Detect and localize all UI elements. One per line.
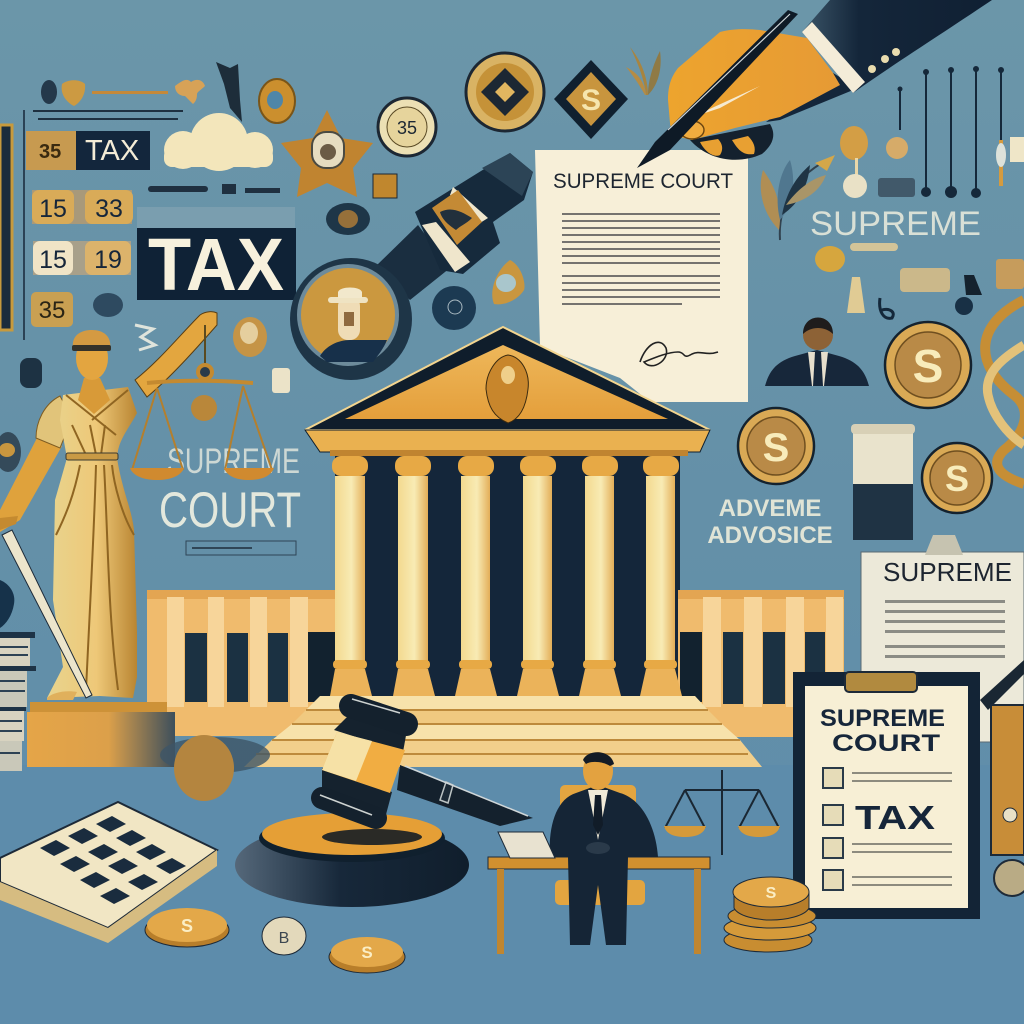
lens bbox=[290, 258, 412, 380]
icon: gold seal bbox=[466, 53, 544, 131]
icon: round stamp: 35 bbox=[397, 118, 417, 138]
steps bbox=[244, 696, 762, 767]
column 4 bbox=[517, 456, 559, 696]
icon: note bbox=[373, 174, 397, 198]
icon: dark plant bbox=[216, 62, 242, 122]
column 2 bbox=[393, 456, 435, 696]
coin B: B bbox=[279, 930, 289, 947]
icon: oval shield bbox=[233, 317, 267, 357]
icon: coin small bbox=[191, 395, 217, 421]
icon: diamond S badge: S bbox=[581, 84, 601, 117]
scales bbox=[132, 325, 272, 470]
speckled band above tax bbox=[137, 207, 295, 228]
number tag 15 33: 15 bbox=[39, 195, 67, 223]
coin right: S bbox=[945, 458, 969, 499]
grid cells bbox=[40, 816, 186, 904]
cuff bbox=[802, 22, 865, 93]
number tag 15 19: 15 bbox=[39, 246, 67, 274]
folds bbox=[56, 390, 134, 690]
top neck bbox=[334, 712, 407, 752]
number tag 15 19 bbox=[33, 241, 131, 275]
icon: flower bbox=[175, 80, 205, 104]
text: supreme court left bbox=[159, 442, 301, 555]
shadow patch bbox=[160, 737, 270, 773]
binder right bbox=[991, 705, 1024, 855]
icon: dark oval bbox=[41, 80, 57, 104]
icon: gold shield bbox=[62, 80, 85, 106]
column 6 bbox=[640, 456, 682, 696]
cuff lower bbox=[422, 222, 470, 272]
panel: left tax labels bbox=[0, 110, 150, 340]
text: adveme advosice: ADVEME bbox=[719, 495, 821, 522]
icon: hanging pens bbox=[898, 66, 1004, 198]
chair bbox=[555, 785, 645, 905]
lawyer at desk bbox=[488, 752, 780, 954]
lady justice statue bbox=[0, 312, 274, 767]
vertical rule bbox=[23, 110, 25, 340]
coin large top: S bbox=[913, 340, 943, 392]
lower arm bbox=[0, 436, 62, 532]
coin fragment bbox=[174, 735, 234, 801]
text: supreme court left: COURT bbox=[159, 482, 301, 538]
icon: helix rope bbox=[985, 300, 1024, 484]
stack of books left bbox=[0, 632, 36, 771]
icon: left flower bbox=[0, 580, 14, 628]
icon: cream chip bbox=[272, 368, 290, 393]
heading: TAX: TAX bbox=[148, 223, 284, 306]
heading: supreme: SUPREME bbox=[810, 205, 981, 243]
text: adveme advosice: ADVOSICE bbox=[707, 522, 833, 549]
man body bbox=[550, 785, 658, 945]
document: supreme court bbox=[535, 150, 748, 402]
document: supreme: SUPREME bbox=[883, 557, 1012, 587]
icon: spoon bbox=[996, 140, 1006, 186]
icon: star emblem bbox=[281, 110, 373, 197]
icon: dash bar bbox=[92, 91, 168, 94]
panel: pediment temple bbox=[147, 327, 844, 767]
small caption lines bbox=[186, 541, 296, 555]
icon: note bbox=[1010, 137, 1024, 162]
columns bbox=[330, 456, 682, 696]
clipboard: SUPREME bbox=[820, 705, 945, 732]
pedestal bbox=[27, 702, 175, 767]
hair bbox=[583, 752, 614, 766]
icon: cream bar bbox=[850, 243, 898, 251]
tax label small: 35 bbox=[39, 141, 61, 163]
tie bbox=[593, 795, 603, 835]
dark fingers bbox=[690, 124, 773, 160]
colonnade back bbox=[335, 456, 680, 696]
decorative icons top row bbox=[0, 47, 661, 628]
coin C bbox=[329, 937, 405, 973]
icon: diamond S badge bbox=[554, 60, 628, 139]
icon: head fragment bbox=[996, 259, 1024, 289]
pen right bbox=[980, 660, 1024, 710]
bottom neck bbox=[322, 768, 392, 822]
clipboard: TAX bbox=[855, 799, 935, 836]
bottom cap bbox=[322, 798, 376, 818]
pans bbox=[664, 826, 780, 837]
desk bbox=[488, 857, 710, 954]
icon: round stamp bbox=[378, 98, 436, 156]
small coin right bottom bbox=[994, 860, 1024, 896]
hair bbox=[73, 330, 110, 349]
icon: cloud bbox=[164, 113, 273, 171]
bottom highlight bbox=[320, 795, 372, 815]
body text lines bbox=[562, 213, 720, 305]
buttons bbox=[868, 48, 900, 73]
clipboard: COURT bbox=[832, 730, 940, 757]
tax label small bbox=[26, 131, 150, 170]
sound block bbox=[235, 813, 469, 907]
head gold bbox=[322, 732, 405, 793]
icon: six mark bbox=[880, 298, 893, 318]
left fence bbox=[147, 590, 335, 736]
small scales bbox=[665, 770, 779, 855]
pen bbox=[637, 10, 798, 168]
head bbox=[583, 752, 613, 790]
icon: striped item bbox=[878, 178, 915, 197]
pediment bbox=[305, 327, 710, 456]
hand bbox=[432, 190, 482, 245]
icon: tan seal bbox=[492, 260, 524, 304]
blindfold bbox=[72, 345, 111, 351]
coin A bbox=[145, 908, 229, 947]
icon: leaf plant bbox=[626, 47, 661, 95]
icon: cream bottle bbox=[847, 277, 865, 313]
coin center bbox=[738, 408, 814, 484]
top highlight bbox=[352, 699, 400, 713]
icon: bottle bbox=[843, 158, 867, 198]
gavel bbox=[235, 699, 533, 907]
left edge strip bbox=[0, 125, 12, 330]
feet bbox=[47, 691, 77, 700]
coin A: S bbox=[181, 916, 193, 936]
handle highlight bbox=[405, 766, 528, 816]
coin large top bbox=[885, 322, 971, 408]
dark blob bbox=[93, 293, 123, 317]
belt bbox=[66, 453, 118, 460]
arm lower sleeve bbox=[374, 225, 450, 300]
tax label small: TAX bbox=[85, 135, 139, 167]
hands bbox=[586, 842, 610, 854]
sleeve left bbox=[36, 396, 72, 448]
raised arm bbox=[135, 312, 217, 397]
coin B bbox=[262, 917, 306, 955]
neck bbox=[78, 378, 110, 414]
number tag 15 19: 19 bbox=[94, 246, 122, 274]
number tag 15 33 bbox=[32, 190, 133, 224]
number tag 35 bbox=[31, 292, 73, 327]
icon: oval emblem bbox=[259, 79, 295, 123]
icon: small dark row bbox=[148, 184, 280, 194]
checkboxes bbox=[823, 768, 843, 890]
column 5 bbox=[579, 456, 621, 696]
icon: dark hook bbox=[964, 275, 982, 295]
stack of coins bbox=[724, 877, 816, 952]
icon: jar bbox=[851, 424, 915, 540]
top cap bbox=[351, 706, 406, 724]
hand bbox=[668, 29, 840, 140]
signature bbox=[640, 342, 718, 366]
icon: gold blob bbox=[886, 137, 908, 159]
sword bbox=[2, 530, 92, 698]
hilt bbox=[0, 516, 18, 530]
icon: right badge bbox=[815, 246, 845, 272]
icon: dark blob left bbox=[20, 358, 42, 388]
icon: squiggle bbox=[135, 325, 155, 350]
shirt bbox=[588, 790, 608, 840]
hand holding pen bbox=[637, 0, 992, 168]
coins on the floor bbox=[145, 908, 405, 973]
lines bbox=[885, 600, 1005, 658]
sleeve bbox=[802, 0, 992, 93]
right column decor bbox=[707, 66, 1024, 549]
clipboard bbox=[793, 672, 980, 919]
icon: small dark seal bbox=[326, 203, 370, 235]
icon: dashed rules bbox=[33, 110, 183, 120]
floor shading bbox=[0, 765, 1024, 1024]
number tag 15 33: 33 bbox=[95, 195, 123, 223]
text: supreme court left: SUPREME bbox=[167, 442, 300, 481]
icon: balloon bbox=[840, 126, 868, 160]
icon: left seal bbox=[0, 432, 21, 472]
coin center: S bbox=[763, 426, 789, 470]
document: supreme court: SUPREME COURT bbox=[553, 170, 733, 193]
head bbox=[76, 336, 108, 380]
nail bbox=[680, 121, 704, 139]
arm wrist bbox=[415, 153, 533, 274]
icon: textured pad bbox=[900, 268, 950, 292]
column 1 bbox=[330, 456, 372, 696]
right pan bbox=[224, 468, 274, 480]
dress bbox=[47, 387, 137, 698]
magnifier with portrait and arm bbox=[290, 153, 533, 380]
laptop bbox=[498, 832, 555, 858]
handle bbox=[397, 765, 533, 826]
icon: dark dot bbox=[955, 297, 973, 315]
coin C: S bbox=[361, 943, 373, 962]
number tag 35: 35 bbox=[39, 297, 65, 324]
finger tips bbox=[700, 136, 755, 156]
lines bbox=[852, 772, 952, 886]
thumb highlight bbox=[690, 86, 760, 118]
left pan bbox=[130, 468, 184, 480]
cuff upper bbox=[450, 187, 488, 223]
icon: emblem bbox=[486, 355, 528, 423]
head light bbox=[322, 732, 372, 781]
text: adveme advosice bbox=[707, 495, 833, 549]
right fence bbox=[678, 590, 844, 737]
upper sleeve tone bbox=[482, 153, 533, 196]
portrait bbox=[320, 288, 387, 362]
coin right bbox=[922, 443, 992, 513]
calendar book bbox=[0, 802, 217, 943]
icon: dark button seal bbox=[432, 286, 476, 330]
handle ring bbox=[440, 782, 453, 803]
stack of coins: S bbox=[766, 885, 777, 902]
portrait: lawyer bbox=[765, 318, 869, 386]
sleeve shadow under hand bbox=[766, 73, 858, 122]
icon: plant spray bbox=[761, 155, 835, 240]
document: supreme bbox=[861, 535, 1024, 742]
column 3 bbox=[455, 456, 497, 696]
